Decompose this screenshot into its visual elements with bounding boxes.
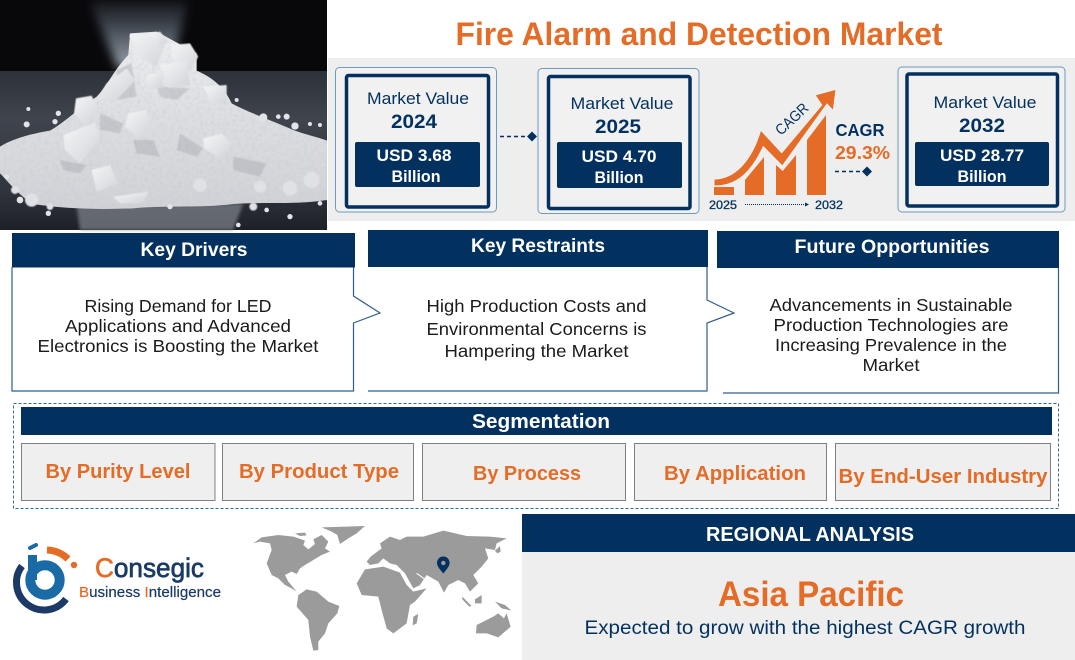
heading: regional analysis: REGIONAL ANALYSIS bbox=[706, 524, 914, 546]
text: future opportunities body: Advancements in Sustainable bbox=[770, 295, 1012, 315]
callout: CAGR 29.3% bbox=[835, 120, 890, 176]
heading: segmentation: Segmentation bbox=[472, 411, 610, 433]
text: future opportunities body: Production Technologies are bbox=[774, 315, 1008, 335]
heading: key restraints: Key Restraints bbox=[471, 236, 605, 257]
card: market value 2025: Billion bbox=[594, 169, 644, 187]
axis: 2025 to 2032 bbox=[709, 198, 843, 212]
market value band bbox=[328, 58, 1075, 221]
segment: by product type: By Product Type bbox=[239, 461, 399, 483]
segment: by end-user industry: By End-User Industry bbox=[838, 466, 1048, 488]
title: Fire Alarm and Detection Market bbox=[456, 16, 943, 52]
text: key drivers body: Applications and Advanced bbox=[65, 316, 291, 336]
card: market value 2024: Market Value bbox=[367, 90, 469, 108]
heading: key restraints bbox=[368, 230, 708, 267]
card: market value 2025 bbox=[538, 68, 699, 214]
card: market value 2025: Market Value bbox=[570, 95, 674, 113]
card: market value 2025: USD 4.70 bbox=[582, 148, 656, 166]
connector: 2024 to 2025 bbox=[500, 132, 537, 142]
text: key restraints body: High Production Costs and bbox=[426, 296, 646, 316]
panel: key drivers bbox=[12, 233, 380, 391]
heading: regional analysis bbox=[522, 514, 1075, 552]
wordmark: Business Intelligence: Business Intelligence bbox=[79, 584, 221, 601]
card: market value 2032: Billion bbox=[958, 168, 1006, 186]
chart: CAGR growth arrow bbox=[709, 89, 843, 212]
text: key restraints body: Environmental Concerns is bbox=[426, 319, 647, 339]
card: market value 2032: USD 28.77 bbox=[940, 147, 1024, 165]
heading: future opportunities: Future Opportunities bbox=[794, 237, 990, 258]
panel: future opportunities bbox=[717, 231, 1059, 393]
card: market value 2032: 2032 bbox=[959, 116, 1005, 137]
card: market value 2024 bbox=[336, 68, 496, 212]
card: market value 2032 bbox=[898, 67, 1065, 212]
card: market value 2024: 2024 bbox=[391, 112, 437, 133]
callout: CAGR 29.3%: CAGR bbox=[836, 120, 885, 140]
text: future opportunities body: Increasing Prevalence in the bbox=[775, 335, 1007, 355]
icon: logo mark bbox=[16, 545, 77, 610]
segment: by process bbox=[422, 444, 626, 500]
text: future opportunities body: Market bbox=[862, 355, 920, 375]
panel: regional analysis bbox=[522, 514, 1075, 660]
photo: white powder pile bbox=[0, 0, 327, 230]
wordmark: Consegic: Consegic bbox=[95, 553, 204, 583]
axis: 2025 to 2032: 2032 bbox=[815, 198, 843, 212]
text: key restraints body: Hampering the Market bbox=[444, 341, 629, 361]
callout: CAGR 29.3%: 29.3% bbox=[835, 143, 890, 163]
axis: 2025 to 2032: 2025 bbox=[709, 198, 737, 212]
map: world map with location pin bbox=[253, 526, 512, 651]
panel: key restraints bbox=[368, 230, 734, 391]
segment: by purity level: By Purity Level bbox=[46, 461, 190, 483]
heading: future opportunities bbox=[717, 231, 1059, 268]
card: market value 2025: 2025 bbox=[595, 117, 641, 138]
segment: by application: By Application bbox=[664, 463, 806, 485]
text: Asia Pacific: Asia Pacific bbox=[718, 575, 904, 614]
icon: location pin bbox=[437, 556, 450, 574]
logo: Consegic Business Intelligence bbox=[16, 545, 221, 610]
text: key drivers body: Electronics is Boosting the Market bbox=[38, 336, 319, 356]
card: market value 2024: Billion bbox=[392, 168, 440, 186]
segment: by purity level bbox=[22, 444, 215, 500]
chart label: rotated CAGR: CAGR bbox=[772, 100, 812, 139]
heading: segmentation bbox=[21, 407, 1052, 435]
heading: key drivers bbox=[12, 233, 355, 268]
segment: by process: By Process bbox=[473, 463, 581, 485]
text: key drivers body: Rising Demand for LED bbox=[84, 296, 272, 316]
card: market value 2032: Market Value bbox=[934, 94, 1036, 112]
segment: by application bbox=[634, 444, 826, 500]
segment: by end-user industry bbox=[836, 444, 1050, 500]
heading: key drivers: Key Drivers bbox=[140, 240, 248, 261]
segment: by product type bbox=[222, 444, 414, 500]
card: market value 2024: USD 3.68 bbox=[376, 147, 452, 165]
text: regional note: Expected to grow with the highest CAGR growth bbox=[584, 618, 1026, 639]
panel: segmentation bbox=[14, 404, 1058, 508]
